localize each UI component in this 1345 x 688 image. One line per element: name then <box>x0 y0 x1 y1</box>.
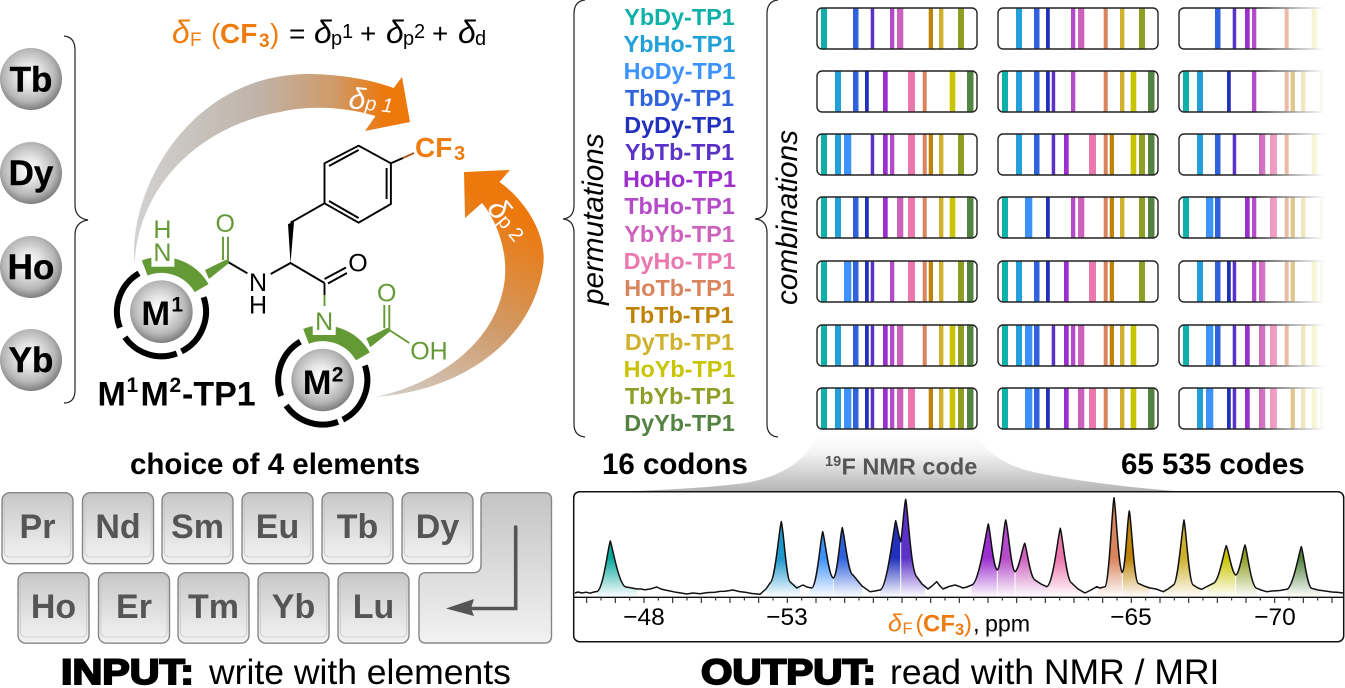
sphere: Ho: Ho <box>8 248 54 287</box>
formula: chemical shift sum: + <box>360 18 376 49</box>
key: Yb <box>258 573 329 643</box>
label: CF3 group: 3 <box>454 143 465 165</box>
key: Ho <box>18 573 89 643</box>
brace: permutations <box>563 0 585 437</box>
key: Pr: Pr <box>20 508 55 546</box>
key: Pr <box>2 493 73 564</box>
codon list: HoYb-TP1 <box>624 356 735 382</box>
key: Er: Er <box>116 588 152 626</box>
axis title: F <box>902 620 913 638</box>
label: M1M2-TP1: -TP1 <box>182 376 256 414</box>
sphere: Tb <box>0 48 62 110</box>
barcode column 1 <box>817 8 977 429</box>
formula: chemical shift sum: ( <box>211 18 221 49</box>
label: 16 codons: 16 codons <box>602 448 748 481</box>
axis title: ) <box>964 611 972 638</box>
key: Eu <box>242 493 313 564</box>
metal binding site M2: OH <box>410 337 448 365</box>
left brace <box>64 36 88 403</box>
codon list: HoHo-TP1 <box>623 166 736 192</box>
caption: OUTPUT <box>701 652 1219 688</box>
formula: chemical shift sum: 2 <box>414 21 425 43</box>
label: M1M2-TP1: 1 <box>126 374 138 397</box>
formula: chemical shift sum: δ <box>458 14 477 50</box>
label: 19F NMR code: F NMR code <box>842 454 977 480</box>
arrow: through-bond shift p2 <box>376 170 544 397</box>
key: Lu: Lu <box>353 588 394 626</box>
metal binding site M2 <box>278 280 448 425</box>
formula: chemical shift sum: + <box>432 18 448 49</box>
sphere: Tb: Tb <box>10 60 52 100</box>
funnel from barcode to spectrum <box>600 436 1190 492</box>
sphere: Ho <box>0 236 62 298</box>
metal binding site M2: M <box>303 364 331 402</box>
metal binding site M1: M <box>141 295 170 333</box>
heading: choice of 4 elements: choice of 4 elements <box>130 448 420 481</box>
formula: chemical shift sum: CF <box>220 18 257 49</box>
codon list <box>623 4 736 436</box>
codon list: YbHo-TP1 <box>624 31 735 57</box>
caption: INPUT <box>61 652 511 688</box>
codon list: YbYb-TP1 <box>624 221 735 247</box>
metal binding site M1: H <box>153 216 171 244</box>
element spheres <box>0 48 62 391</box>
sphere: Yb <box>0 329 62 391</box>
codon list: HoTb-TP1 <box>624 275 735 301</box>
brace: combinations <box>755 0 778 437</box>
label: amide N-H <box>249 269 267 320</box>
key: Ho: Ho <box>31 588 76 626</box>
formula: chemical shift sum: δ <box>386 14 405 50</box>
keyboard of lanthanide elements <box>2 493 552 643</box>
key: Tm <box>178 573 249 643</box>
label: M1M2-TP1: M <box>98 376 126 414</box>
formula: chemical shift sum: = <box>289 18 305 49</box>
label: amide N-H: N <box>249 269 267 297</box>
codon list: TbYb-TP1 <box>625 383 734 409</box>
label: amide N-H: H <box>249 292 267 320</box>
label: combinations: combinations <box>771 130 804 305</box>
axis tick labels: −53 <box>766 604 808 631</box>
codon list: YbDy-TP1 <box>624 4 735 30</box>
key: Sm: Sm <box>171 508 224 546</box>
arrow: through-bond shift p1: δp 1 <box>347 82 395 120</box>
molecule: peptide backbone and benzene <box>228 146 414 306</box>
formula: chemical shift sum: p <box>331 28 342 50</box>
key: Yb: Yb <box>272 588 315 626</box>
coloured peak fills <box>597 498 1320 597</box>
axis title: δ <box>888 610 903 638</box>
arrow: through-bond shift p2: δp 2 <box>481 192 535 248</box>
arrow: through-bond shift p1 <box>134 74 410 263</box>
formula: chemical shift sum: 3 <box>259 31 270 52</box>
codon list: DyHo-TP1 <box>624 248 735 274</box>
metal binding site M1: O <box>215 210 235 238</box>
metal binding site M2: O <box>377 280 396 308</box>
key: Dy <box>402 493 473 564</box>
codon list: TbHo-TP1 <box>624 193 735 219</box>
axis title: 3 <box>955 621 964 639</box>
formula: chemical shift sum: d <box>475 28 486 50</box>
sphere: Dy <box>0 142 62 204</box>
codon list: DyDy-TP1 <box>624 112 735 138</box>
key: Nd <box>82 493 154 564</box>
axis title <box>888 610 1030 639</box>
label: CF3 group: CF <box>415 132 452 163</box>
label: M1M2-TP1 <box>98 374 256 414</box>
codon list: HoDy-TP1 <box>624 58 735 84</box>
codon list: DyYb-TP1 <box>624 410 735 436</box>
formula: chemical shift sum: δ <box>172 14 191 50</box>
label: 19F NMR code: 19 <box>825 454 841 470</box>
formula: chemical shift sum: 1 <box>342 21 353 43</box>
formula: chemical shift sum: F <box>190 30 202 51</box>
axis tick labels: −65 <box>1110 604 1152 631</box>
axis tick labels: −48 <box>623 604 665 631</box>
sphere: Dy: Dy <box>9 154 54 193</box>
formula: chemical shift sum <box>172 14 486 52</box>
label: M1M2-TP1: 2 <box>170 374 181 397</box>
codon list: YbTb-TP1 <box>625 139 734 165</box>
axis title: CF <box>923 611 955 638</box>
key: Tb: Tb <box>337 508 378 546</box>
metal binding site M1: N <box>153 239 171 267</box>
label: carbonyl O: O <box>348 250 368 278</box>
key: Tm: Tm <box>188 588 239 626</box>
axis line and ticks <box>574 597 1344 603</box>
formula: chemical shift sum: ) <box>270 18 279 49</box>
axis tick labels <box>623 604 1296 631</box>
spectrum trace <box>575 498 1343 594</box>
label: CF3 group <box>415 132 465 165</box>
key: Nd: Nd <box>95 508 141 546</box>
barcode grid of combinations <box>817 0 1345 436</box>
key: enter with return arrow <box>419 493 552 643</box>
barcode column 2 <box>998 8 1158 429</box>
panel: 19F NMR spectrum <box>574 492 1344 642</box>
axis title: ( <box>916 611 924 638</box>
formula: chemical shift sum: p <box>403 28 414 50</box>
axis tick labels: −70 <box>1254 604 1296 631</box>
codon list: TbDy-TP1 <box>625 85 734 111</box>
axis title: , <box>973 611 980 638</box>
key: Dy: Dy <box>416 508 459 546</box>
codon list: DyTb-TP1 <box>625 329 734 355</box>
metal binding site M1 <box>117 210 235 356</box>
label: 65 535 codes: 65 535 codes <box>1121 448 1305 481</box>
label: M1M2-TP1: M <box>140 376 169 414</box>
formula: chemical shift sum: δ <box>314 14 333 50</box>
metal binding site M2: 2 <box>332 364 343 386</box>
label: permutations: permutations <box>577 133 610 306</box>
key: Tb <box>322 493 393 564</box>
barcode column 3, fading out <box>1179 0 1345 436</box>
key: Lu <box>338 573 409 643</box>
key: Sm <box>162 493 233 564</box>
key: Eu: Eu <box>256 508 299 546</box>
key: Er <box>98 573 170 643</box>
axis title: ppm <box>985 611 1030 637</box>
sphere: Yb: Yb <box>9 341 53 380</box>
metal binding site M2: N <box>315 308 333 336</box>
codon list: TbTb-TP1 <box>626 302 733 328</box>
metal binding site M1: 1 <box>171 294 183 317</box>
